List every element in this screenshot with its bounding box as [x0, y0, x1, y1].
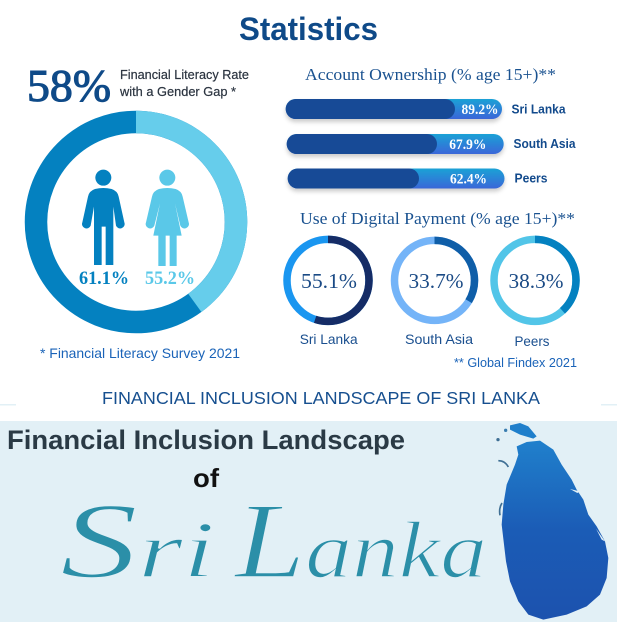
- icon: woman: [146, 170, 189, 266]
- panel: financial literacy: [27, 61, 249, 361]
- banner heading: Financial Inclusion Landscape: [7, 425, 405, 455]
- panel: banner: [0, 421, 617, 622]
- ring: Sri Lanka: Sri Lanka: [300, 331, 358, 347]
- bar: South Asia: 67.9%: [449, 137, 486, 153]
- bar: Sri Lanka: [286, 99, 566, 119]
- ring: South Asia: [394, 240, 474, 347]
- icon: Sri Lanka map: [496, 423, 608, 620]
- heading: Use of Digital Payment (% age 15+)**: [300, 209, 575, 228]
- panel: digital payment: [287, 209, 577, 370]
- bar: Sri Lanka: Sri Lanka: [512, 102, 566, 116]
- bar: Peers: [288, 168, 548, 188]
- bar: Peers: 62.4%: [450, 172, 487, 188]
- banner script title: [60, 482, 487, 601]
- big stat: 58%: 58%: [27, 61, 111, 111]
- source note: ** Global Findex 2021: [454, 356, 577, 370]
- banner script title: Lanka: [233, 482, 487, 601]
- ring: Sri Lanka: 55.1%: [301, 269, 357, 293]
- source note: * Financial Literacy Survey 2021: [40, 345, 240, 361]
- icon: man: [82, 170, 125, 265]
- ring: Peers: 38.3%: [508, 269, 564, 293]
- female rate: 55.2%: [145, 268, 195, 289]
- ring: South Asia: South Asia: [405, 331, 473, 347]
- section heading: FINANCIAL INCLUSION LANDSCAPE OF SRI LANKA: [102, 388, 540, 408]
- bar: Peers: Peers: [514, 170, 548, 186]
- ring: Peers: [494, 239, 576, 349]
- ring: South Asia: 33.7%: [408, 269, 464, 293]
- panel: account ownership: [286, 65, 576, 188]
- ring: Sri Lanka: [287, 239, 369, 347]
- stat description: with a Gender Gap *: [119, 85, 236, 99]
- bar: Sri Lanka: 89.2%: [462, 102, 498, 118]
- heading: Account Ownership (% age 15+)**: [305, 65, 556, 84]
- stat description: [119, 68, 249, 99]
- stat description: Financial Literacy Rate: [120, 68, 249, 82]
- donut chart: gender literacy: [36, 122, 236, 322]
- banner script title: S ri: [60, 482, 215, 601]
- title: Statistics: [239, 11, 378, 47]
- bar: South Asia: South Asia: [514, 136, 576, 151]
- banner of: of: [193, 463, 219, 493]
- bar: South Asia: [287, 134, 576, 154]
- ring: Peers: Peers: [514, 333, 550, 349]
- male rate: 61.1%: [79, 268, 129, 289]
